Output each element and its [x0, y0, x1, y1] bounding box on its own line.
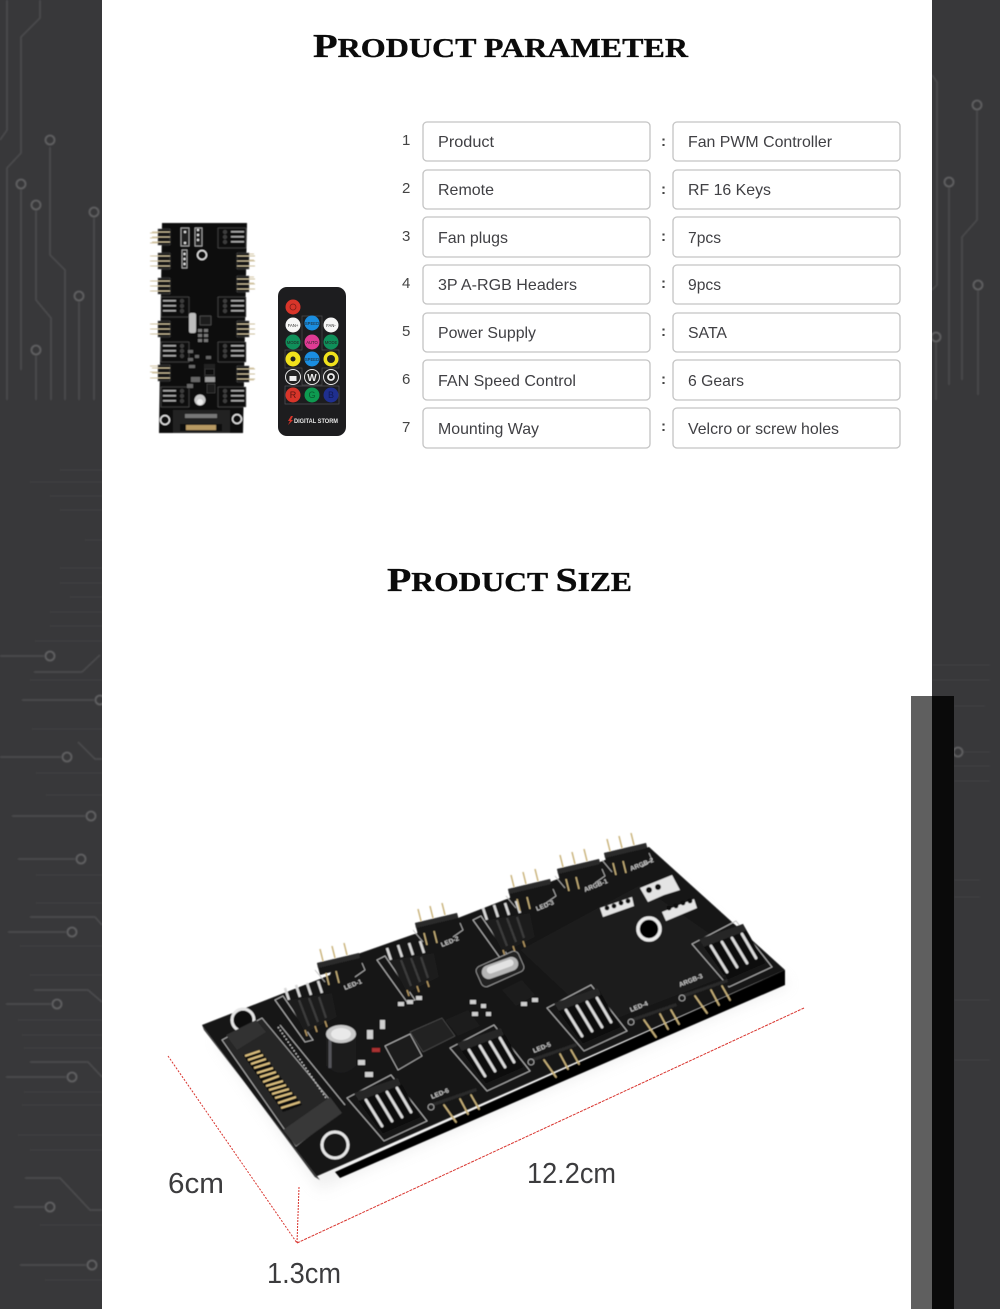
- row 6: [402, 360, 900, 400]
- row 2: RF 16 Keys: [688, 182, 771, 199]
- remote control: G: [308, 390, 316, 400]
- row 3: Fan plugs: [438, 230, 508, 247]
- remote control: MODE: [325, 340, 337, 345]
- remote control: AUTO: [306, 340, 319, 345]
- row 7: 7: [402, 419, 410, 436]
- row 7: Mounting Way: [438, 421, 539, 438]
- dimension label: 6cm: 6cm: [168, 1168, 224, 1200]
- row 4: 9pcs: [688, 277, 721, 294]
- title: product size: PRODUCT SIZE: [387, 562, 632, 599]
- row 5: SATA: [688, 325, 727, 342]
- large board photo: [202, 833, 790, 1190]
- silkscreen labels: ARGB-2: [629, 857, 655, 873]
- SATA connector: [222, 1018, 345, 1146]
- row 2: 2: [402, 180, 410, 197]
- pad strips: [600, 875, 697, 921]
- dimension label: 12.2cm: 12.2cm: [527, 1158, 616, 1190]
- row 5: 5: [402, 323, 410, 340]
- silkscreen labels: LED-1: [343, 978, 364, 992]
- remote control: MODE: [287, 340, 299, 345]
- remote control: B: [328, 390, 334, 400]
- silkscreen labels: LED-2: [440, 935, 461, 949]
- board underside: [335, 970, 785, 1178]
- parameter table: [402, 122, 900, 448]
- row 4: :: [661, 275, 666, 292]
- row 3: 3: [402, 228, 410, 245]
- row 7: :: [661, 418, 666, 435]
- row 1: Fan PWM Controller: [688, 134, 833, 151]
- row 5: Power Supply: [438, 325, 536, 342]
- row 1: [402, 122, 900, 161]
- remote control: FAN+: [288, 323, 299, 328]
- row 3: [402, 217, 900, 257]
- crystal: [475, 950, 525, 988]
- row 3: 7pcs: [688, 230, 721, 247]
- holes: [232, 918, 660, 1158]
- silkscreen labels: LED-4: [629, 1000, 650, 1014]
- row 2: :: [661, 181, 666, 198]
- remote control: DIGITAL STORM: [294, 418, 338, 425]
- title: product parameter: PRODUCT PARAMETER: [313, 28, 689, 65]
- remote control: SPEED: [305, 357, 319, 362]
- remote control: W: [307, 373, 317, 384]
- remote control: R: [290, 390, 297, 400]
- remote control: SPEED: [305, 321, 319, 326]
- row 3: :: [661, 228, 666, 245]
- row 6: :: [661, 371, 666, 388]
- product photo: board and remote: [150, 223, 346, 436]
- silkscreen labels: ARGB-3: [678, 973, 704, 989]
- remote control: FAN-: [326, 323, 336, 328]
- silkscreen labels: ARGB-1: [583, 878, 609, 894]
- lower fan connectors: [347, 921, 772, 1141]
- row 4: 3P A-RGB Headers: [438, 277, 577, 294]
- row 6: 6 Gears: [688, 373, 744, 390]
- row 7: Velcro or screw holes: [688, 421, 839, 438]
- row 1: Product: [438, 134, 495, 151]
- row 5: :: [661, 323, 666, 340]
- row 1: :: [661, 133, 666, 150]
- upper pin headers: [315, 833, 652, 985]
- scroll bar overlay: [911, 696, 954, 1309]
- dimension lines: [168, 1008, 804, 1243]
- chips and capacitor: [326, 980, 538, 1077]
- lower pin headers: [428, 979, 731, 1122]
- row 6: FAN Speed Control: [438, 373, 576, 390]
- row 4: 4: [402, 275, 410, 292]
- row 2: Remote: [438, 182, 494, 199]
- silkscreen labels: LED-5: [532, 1041, 553, 1055]
- silkscreen labels: LED-3: [535, 899, 556, 913]
- circuit background: left strip: [0, 0, 104, 1280]
- row 1: 1: [402, 132, 410, 149]
- dimension label: 1.3cm: 1.3cm: [267, 1258, 341, 1290]
- silkscreen labels: [343, 857, 704, 1101]
- board top: [202, 847, 785, 1177]
- row 7: [402, 408, 900, 448]
- row 4: [402, 265, 900, 304]
- row 6: 6: [402, 371, 410, 388]
- silkscreen labels: LED-6: [430, 1087, 451, 1101]
- row 5: [402, 313, 900, 352]
- small controller board: [150, 223, 255, 433]
- row 2: [402, 170, 900, 209]
- circuit background: right strip: [932, 75, 990, 1060]
- upper fan connectors: [275, 901, 535, 1042]
- remote control: [278, 287, 346, 436]
